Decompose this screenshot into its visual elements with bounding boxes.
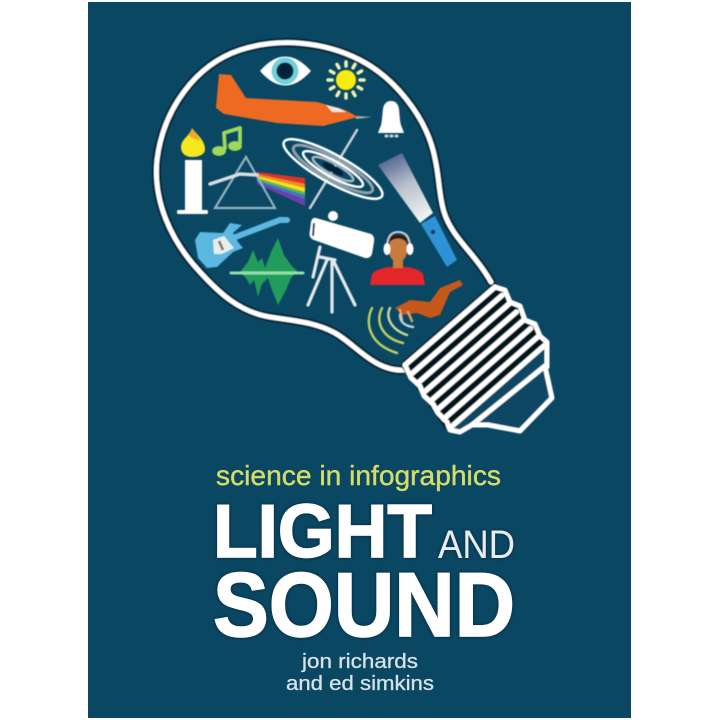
icon: guitar xyxy=(195,220,287,268)
icon: prism with rainbow xyxy=(210,157,305,208)
icon: galaxy xyxy=(277,130,389,208)
icon: person with headphones xyxy=(370,232,425,285)
icon: bell xyxy=(378,101,404,136)
bulb screw base xyxy=(405,287,552,432)
light bulb outline xyxy=(156,43,491,370)
authors: jon richards xyxy=(301,651,418,673)
authors: and ed simkins xyxy=(286,673,434,695)
icon: music note xyxy=(214,128,240,154)
main title: SOUND xyxy=(213,555,515,656)
series title: science in infographics xyxy=(216,460,501,491)
cover background panel xyxy=(88,2,631,718)
main title: AND xyxy=(438,523,515,567)
icon: eye xyxy=(260,56,311,86)
icon: sound wave xyxy=(231,238,303,305)
icon: telescope xyxy=(308,211,374,312)
icon: sun xyxy=(328,62,364,98)
icon: flashlight xyxy=(378,153,457,267)
icon: rocket plane xyxy=(216,74,372,126)
main title: LIGHT xyxy=(213,489,432,573)
main title xyxy=(213,489,515,656)
icon: candle xyxy=(177,128,208,214)
authors xyxy=(286,651,434,695)
icon: hand with sound arcs xyxy=(369,280,463,353)
